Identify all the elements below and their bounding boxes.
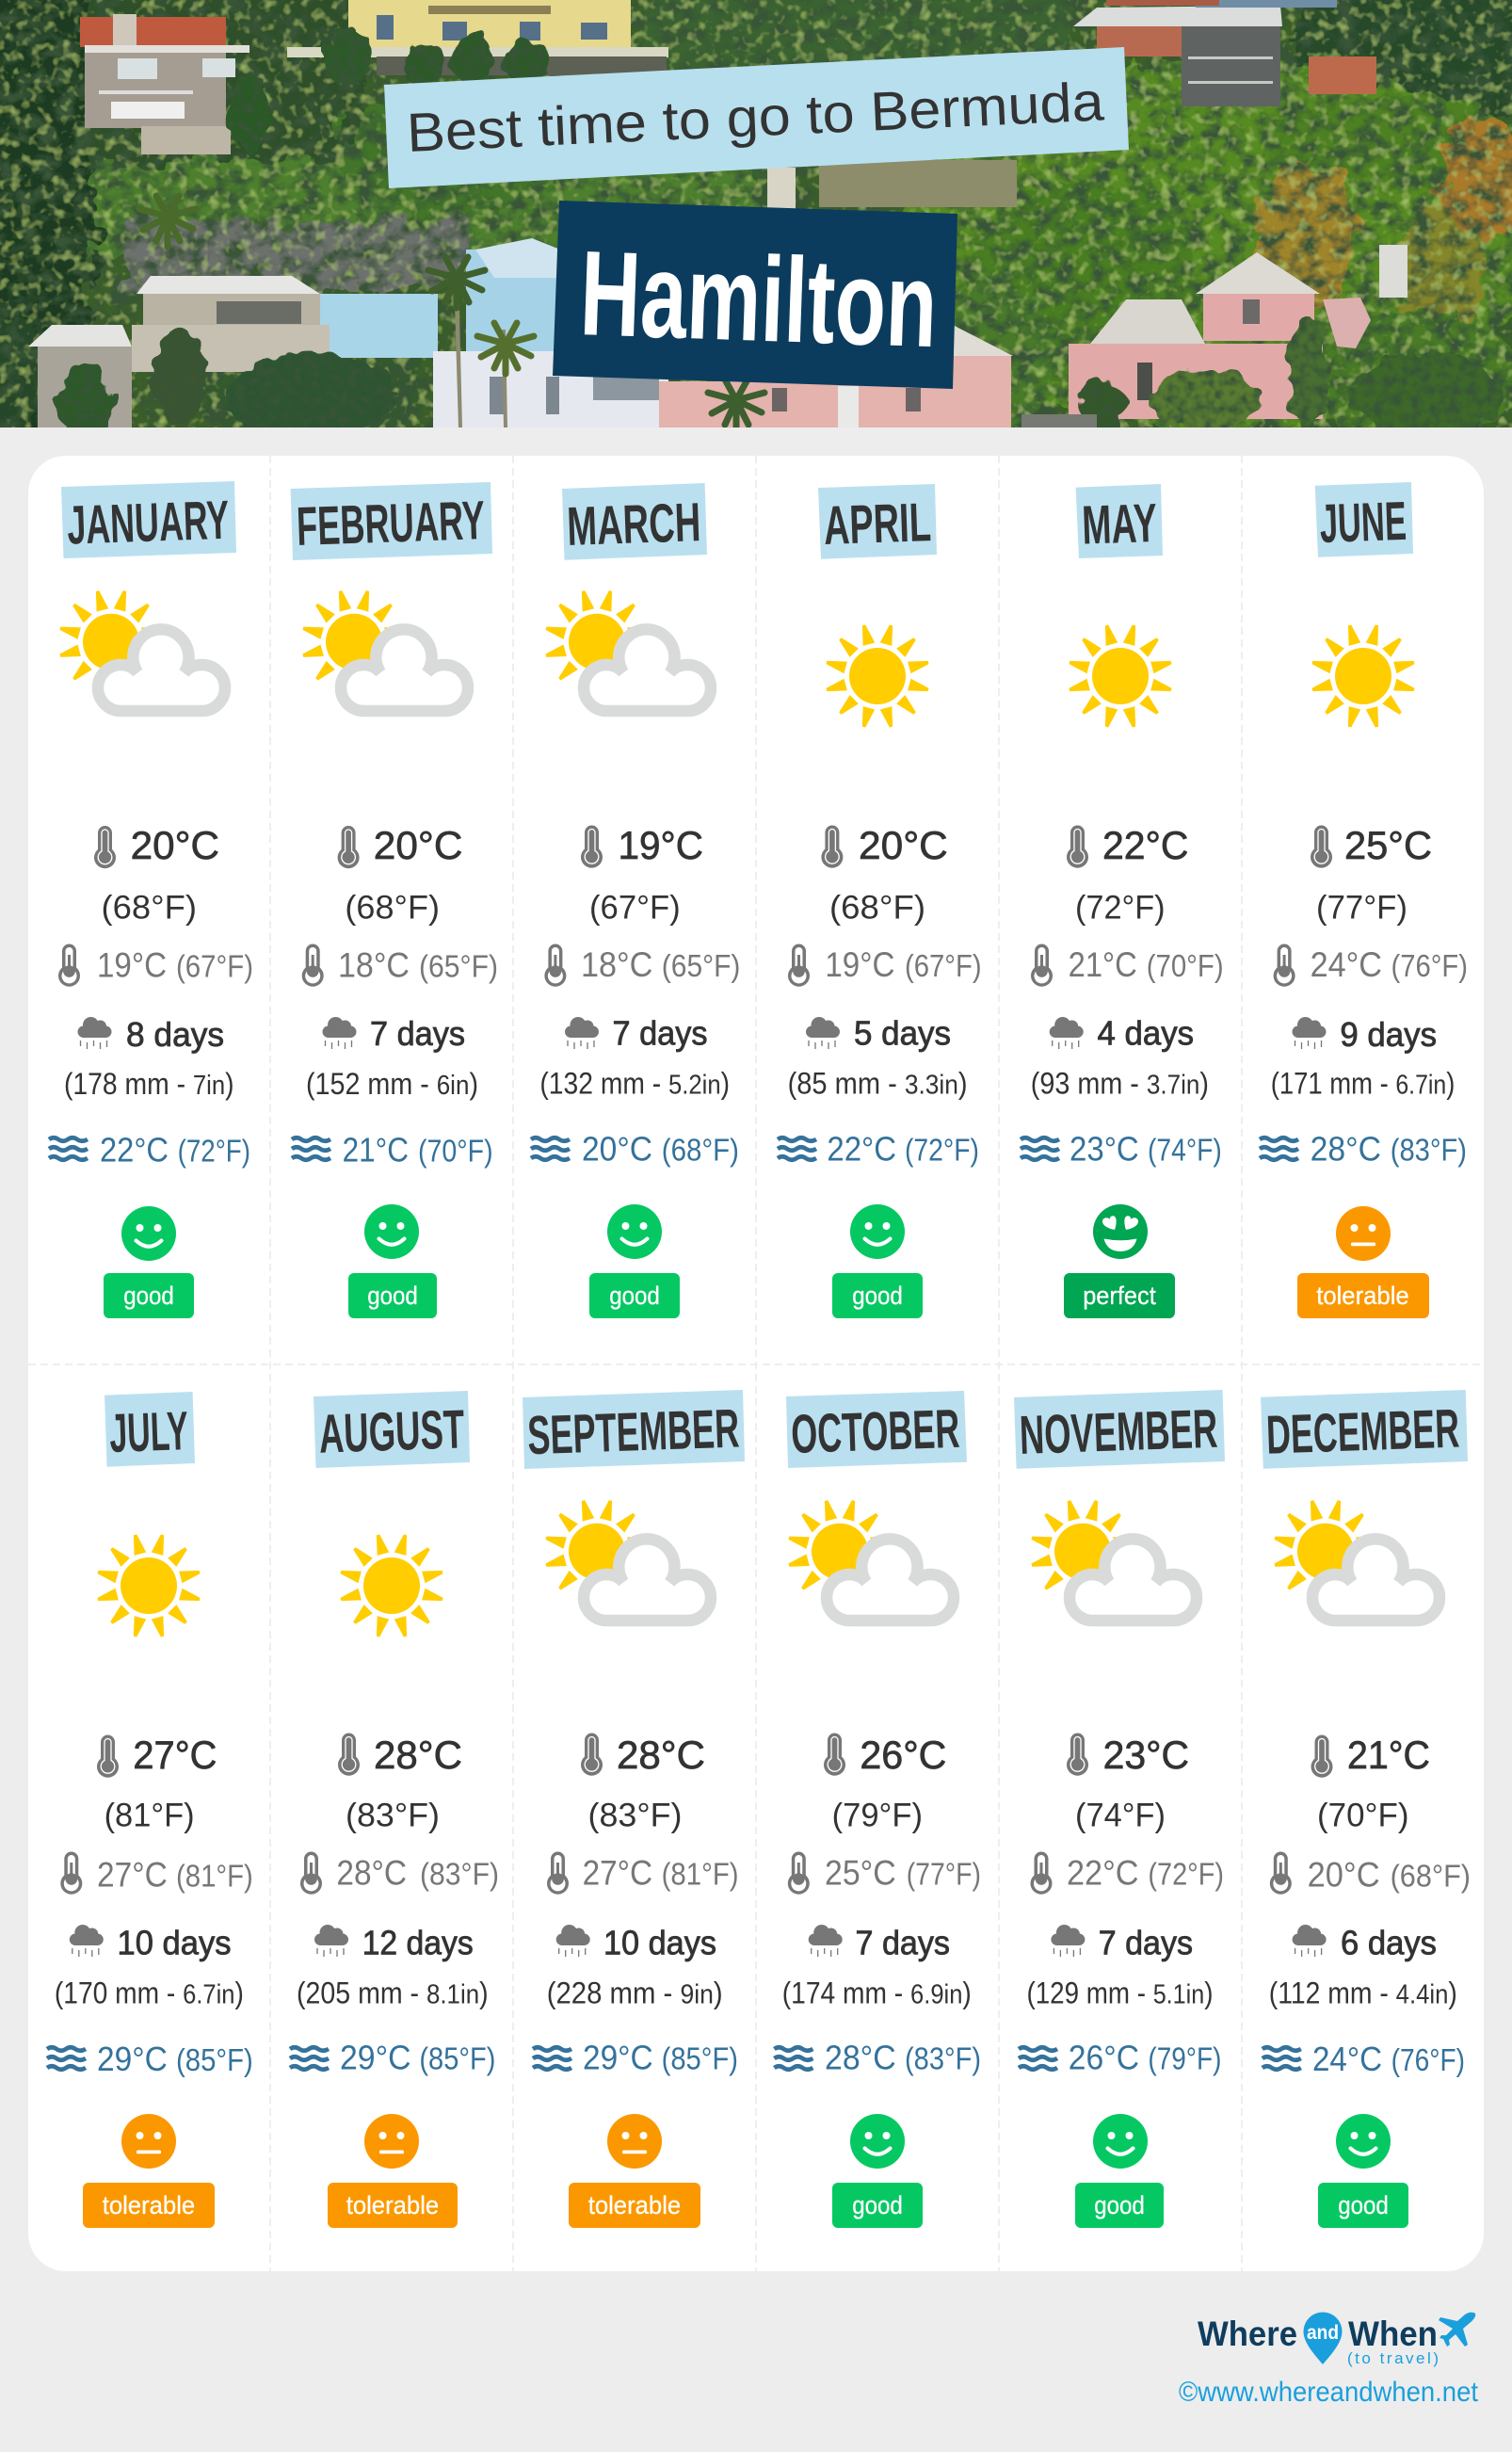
heading: July: JULY [108,1400,189,1464]
banner: Best time to go to Bermuda: Best time to go to Bermuda [406,71,1106,164]
rain: 10 days [603,1924,716,1962]
heading: June: JUNE [1319,491,1407,555]
sea temperature [290,2038,495,2076]
month: April [778,484,982,1318]
sea temperature [531,1130,739,1169]
rain: (93 mm - 3.7in) [1031,1067,1209,1101]
sea temperature [533,2038,738,2076]
rain [1271,1015,1455,1101]
rating: good: good [367,1282,418,1310]
heading: February: FEBRUARY [296,490,486,557]
rain [788,1013,968,1101]
logo: Where and When: (to travel) [1347,2349,1439,2367]
rain: (171 mm - 6.7in) [1271,1067,1455,1101]
icon: sun [1068,623,1173,729]
heading: May: MAY [1081,492,1158,557]
rain [1026,1924,1213,2009]
rating: good [1318,2114,1408,2228]
rating: good [832,2114,923,2228]
sea temperature [774,2038,981,2076]
air temperature: (68°F) [829,889,925,927]
air temperature [1311,823,1432,927]
air temperature [1067,823,1188,927]
rating: tolerable [569,2114,700,2228]
feels-like temperature [544,944,740,987]
rating: tolerable: tolerable [103,2191,195,2219]
feels-like temperature [1031,944,1224,987]
air temperature: (81°F) [105,1797,195,1834]
feels-like temperature: 25°C [825,1854,896,1893]
rating: tolerable: tolerable [1316,1282,1409,1310]
logo: Where and When: Where [1198,2315,1297,2353]
sea temperature: (76°F) [1391,2042,1465,2077]
rain [782,1924,972,2009]
icon: map pin [1303,2313,1343,2364]
air temperature: 19°C [618,823,703,867]
sea temperature: 22°C [827,1130,896,1169]
air temperature [338,1733,462,1834]
rating: tolerable [1297,1206,1429,1318]
heading: May [1076,484,1163,558]
logo: Where and When: and [1307,2322,1339,2344]
feels-like temperature: 18°C [581,945,652,984]
feels-like temperature: 28°C [336,1854,407,1893]
rain: (152 mm - 6in) [306,1067,478,1101]
sea temperature: 22°C [100,1130,169,1170]
air temperature: (70°F) [1317,1797,1408,1834]
banner: Best time to go to Bermuda [384,47,1129,188]
rain: (205 mm - 8.1in) [297,1976,489,2009]
rating: tolerable [83,2114,215,2228]
rating: good [832,1204,923,1318]
feels-like temperature: (65°F) [419,949,498,983]
sea temperature: 28°C [825,2038,896,2076]
feels-like temperature: 22°C [1067,1854,1139,1893]
air temperature [824,1733,946,1834]
sea temperature: 23°C [1070,1130,1139,1169]
rating: perfect: perfect [1083,1282,1156,1310]
feels-like temperature [547,1851,739,1895]
sea temperature [1019,2038,1221,2076]
rating: good: good [1338,2191,1389,2219]
rain: 8 days [126,1015,224,1054]
heading: November [1014,1390,1225,1469]
heading: August [314,1391,470,1468]
feels-like temperature: 27°C [583,1854,652,1893]
sea temperature [1263,2040,1465,2078]
feels-like temperature: (77°F) [907,1857,981,1892]
air temperature: (83°F) [346,1797,440,1834]
feels-like temperature [1030,1851,1224,1895]
heading: September [523,1390,745,1469]
heading: March: MARCH [566,492,701,557]
feels-like temperature: (68°F) [1391,1859,1471,1894]
heading: August: AUGUST [318,1398,465,1465]
feels-like temperature: (81°F) [176,1858,253,1893]
air temperature: 26°C [860,1733,946,1777]
sea temperature: (83°F) [1391,1133,1467,1168]
feels-like temperature: (67°F) [905,948,982,983]
sea temperature: 28°C [1311,1130,1381,1169]
air temperature: (74°F) [1075,1797,1166,1834]
sea temperature: (85°F) [662,2041,738,2075]
feels-like temperature: (70°F) [1147,948,1224,983]
rain: (228 mm - 9in) [547,1976,723,2009]
feels-like temperature: (76°F) [1391,948,1468,983]
rain [547,1924,723,2009]
air temperature: 21°C [1347,1733,1430,1777]
icon: sun [339,1533,444,1638]
sea temperature: 20°C [582,1130,652,1169]
air temperature: 25°C [1344,823,1432,867]
heading: September: SEPTEMBER [526,1397,740,1466]
rain [1269,1924,1457,2009]
feels-like temperature: 19°C [97,945,167,985]
feels-like temperature [1270,1851,1471,1895]
rain: 4 days [1098,1013,1194,1053]
rain: (85 mm - 3.3in) [788,1067,968,1101]
sea temperature: (68°F) [662,1133,739,1168]
heading: April [818,484,937,559]
rain: (174 mm - 6.9in) [782,1976,972,2009]
sea temperature: (74°F) [1148,1133,1222,1168]
rating: good [348,1204,437,1318]
air temperature: (68°F) [102,889,197,927]
feels-like temperature: (81°F) [662,1857,739,1892]
air temperature [338,823,462,927]
rating: tolerable: tolerable [346,2191,439,2219]
month: March [531,483,740,1318]
sea temperature [1021,1130,1222,1169]
icon: sun [96,1533,201,1638]
feels-like temperature: (65°F) [662,948,740,983]
sea temperature: 21°C [343,1130,409,1170]
air temperature: (77°F) [1316,889,1407,927]
air temperature [97,1733,217,1834]
air temperature: 20°C [374,823,462,867]
feels-like temperature: 24°C [1311,945,1382,984]
month: November [1014,1390,1225,2228]
buildings [80,17,226,47]
feels-like temperature: 20°C [1308,1856,1380,1895]
icon: airplane [1439,2313,1475,2347]
banner: Hamilton: Hamilton [578,226,940,373]
rain: 7 days [1099,1924,1193,1962]
rain: (129 mm - 5.1in) [1026,1976,1213,2009]
air temperature: 20°C [859,823,948,867]
rating: good: good [852,2191,903,2219]
feels-like temperature [788,944,982,987]
rating: good: good [609,1282,660,1310]
month: September [523,1390,745,2228]
icon: sun behind cloud [1030,1499,1197,1621]
rating: tolerable [328,2114,458,2228]
feels-like temperature [788,1851,981,1895]
air temperature: (67°F) [589,889,681,927]
air temperature: 23°C [1103,1733,1189,1777]
feels-like temperature: (67°F) [176,949,253,983]
rain: (178 mm - 7in) [64,1067,234,1101]
air temperature: 28°C [374,1733,462,1777]
rating: tolerable: tolerable [588,2191,681,2219]
sea temperature [47,2040,253,2078]
banner: Hamilton [553,201,957,389]
photo: Hamilton hillside [0,0,1512,427]
heading: February [291,482,492,560]
website credit: ©www.whereandwhen.net [1179,2377,1479,2408]
month: December [1261,1390,1471,2228]
heading: March [562,483,707,560]
rain: 7 days [855,1924,950,1962]
air temperature: (83°F) [587,1797,682,1834]
rating: perfect [1064,1204,1175,1318]
logo: Where and When [1198,2313,1475,2367]
rating: good: good [1094,2191,1145,2219]
air temperature: 28°C [617,1733,705,1777]
air temperature [581,1733,705,1834]
air temperature: 27°C [133,1733,217,1777]
panel: month grid [28,456,1484,2271]
sea temperature: (79°F) [1148,2041,1221,2075]
rain: (132 mm - 5.2in) [539,1067,730,1101]
rating: good [104,1206,194,1318]
sea temperature [778,1130,979,1169]
sea temperature: (72°F) [905,1133,979,1168]
feels-like temperature: (72°F) [1148,1857,1224,1892]
heading: November: NOVEMBER [1019,1398,1218,1466]
month: May [1021,484,1224,1318]
sea temperature [1260,1130,1467,1169]
month: July [47,1392,253,2228]
feels-like temperature [1274,944,1468,987]
air temperature: 20°C [131,823,219,867]
sea temperature [292,1130,493,1170]
icon: sun behind cloud [787,1499,954,1621]
heading: January: JANUARY [66,490,230,557]
feels-like temperature: 18°C [338,945,410,985]
rain: 12 days [362,1924,474,1962]
month: June [1260,482,1468,1318]
air temperature: (79°F) [832,1797,923,1834]
heading: July [105,1392,195,1467]
month: October [774,1391,981,2228]
month: August [290,1391,499,2228]
sea temperature: 29°C [97,2040,168,2078]
icon: sun behind cloud [58,589,225,711]
month: February [291,482,498,1318]
sea temperature: (83°F) [905,2041,981,2075]
icon: sun [1311,623,1416,729]
rain [1031,1013,1209,1101]
logo: Where and When: When [1348,2315,1438,2353]
feels-like temperature: 21°C [1069,945,1137,984]
air temperature: 22°C [1102,823,1188,867]
feels-like temperature [300,1851,499,1895]
feels-like temperature: 19°C [825,945,894,984]
heading: April: APRIL [823,492,932,557]
rain: (170 mm - 6.7in) [55,1976,244,2009]
rain: 9 days [1340,1015,1437,1054]
feels-like temperature: (83°F) [420,1857,499,1892]
icon: sun [825,623,930,729]
rating: good: good [123,1282,174,1310]
rain [55,1924,244,2009]
air temperature: (72°F) [1075,889,1166,927]
sea temperature [49,1130,250,1170]
rain [306,1014,478,1101]
sea temperature: 26°C [1069,2038,1139,2076]
sea temperature: (72°F) [178,1134,250,1168]
sea temperature: (85°F) [176,2042,253,2077]
rain: 10 days [117,1924,232,1962]
rain: (112 mm - 4.4in) [1269,1976,1457,2009]
sea temperature: 24°C [1312,2040,1382,2078]
palms [455,310,507,427]
feels-like temperature: 27°C [97,1855,168,1894]
rain [64,1015,234,1101]
air temperature [94,823,219,927]
heading: January [61,481,236,558]
air temperature [1311,1733,1430,1834]
rain: 7 days [612,1013,708,1053]
heading: October [786,1391,967,1468]
icon: sun behind cloud [544,589,711,711]
sea temperature: 29°C [583,2038,653,2076]
rain: 7 days [370,1014,465,1053]
heading: October: OCTOBER [790,1398,960,1465]
air temperature [581,823,703,927]
foreground trees [56,28,1502,438]
icon: sun behind cloud [301,589,468,711]
feels-like temperature [302,944,498,987]
air temperature: (68°F) [345,889,440,927]
rain: 5 days [854,1013,951,1053]
feels-like temperature [58,944,253,987]
heading: June [1315,482,1413,557]
icon: sun behind cloud [544,1499,711,1621]
sea temperature: (70°F) [418,1134,493,1168]
month: January [49,481,253,1318]
rain [539,1013,730,1101]
rating: good [589,1204,680,1318]
rain [297,1924,489,2009]
air temperature [821,823,948,927]
rain: 6 days [1341,1924,1437,1962]
rating: good [1075,2114,1164,2228]
sea temperature: 29°C [340,2038,410,2076]
icon: sun behind cloud [1273,1499,1440,1621]
sea temperature: (85°F) [419,2041,495,2075]
rating: good: good [852,1282,903,1310]
air temperature [1067,1733,1189,1834]
feels-like temperature [60,1851,253,1895]
